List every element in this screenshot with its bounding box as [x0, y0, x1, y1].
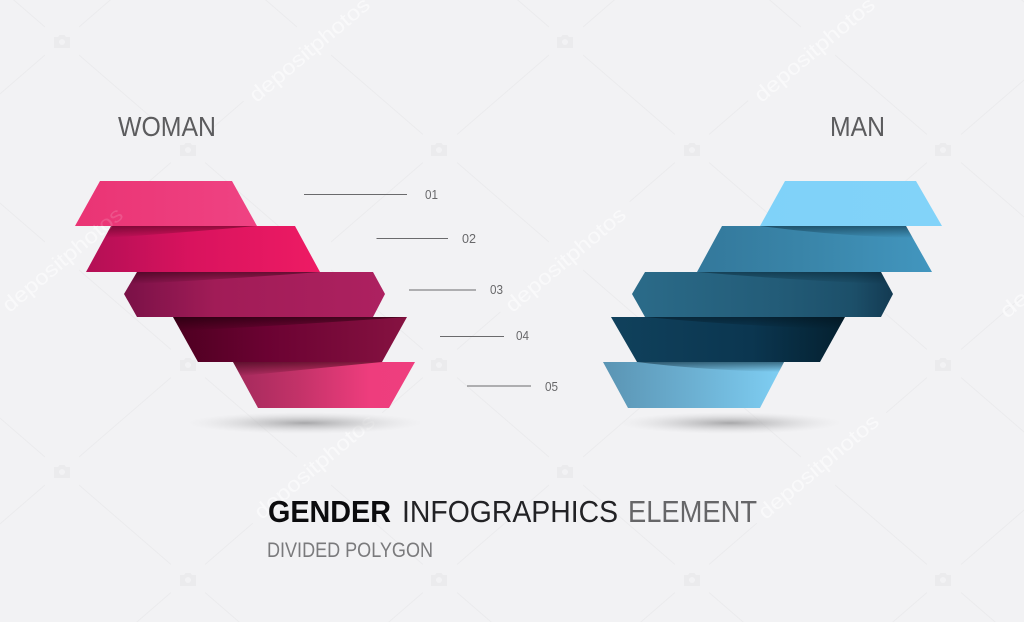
watermark text: depositphotos: [501, 203, 631, 317]
label 01: 01: [425, 188, 438, 202]
main title: [268, 494, 757, 529]
man band 5: [603, 362, 784, 408]
heading: woman: WOMAN: [118, 111, 216, 142]
watermark text: depositphotos: [750, 0, 880, 107]
woman band 5: [233, 362, 415, 408]
woman band 4: [173, 317, 407, 362]
man band 4: [611, 317, 845, 362]
watermark text: depositphotos: [250, 410, 380, 524]
label 02: [376, 232, 476, 246]
watermark camera icons: [54, 35, 951, 586]
man band 2: [697, 226, 932, 272]
man band 1: [760, 181, 942, 226]
watermark text: depositphotos: [245, 0, 375, 107]
label 04: [440, 329, 529, 343]
leader labels: [304, 188, 558, 394]
main title: INFOGRAPHICS: [402, 494, 618, 529]
watermark over woman polygon: depositphotos: [0, 203, 128, 317]
label 05: [467, 380, 558, 394]
shadow: woman polygon: [187, 412, 423, 434]
shadow: man polygon: [618, 412, 842, 434]
main title: ELEMENT: [628, 494, 757, 529]
woman band 1: [75, 181, 257, 226]
panel: woman divided polygon: [75, 181, 415, 408]
main title: GENDER: [268, 494, 391, 529]
label 03: 03: [490, 283, 503, 297]
watermark text: depositphotos: [754, 410, 884, 524]
watermark text: depositphotos: [0, 203, 128, 317]
panel: man divided polygon: [603, 181, 942, 408]
label 04: 04: [516, 329, 529, 343]
label 05: 05: [545, 380, 558, 394]
label 02: 02: [462, 232, 476, 246]
man band 3: [632, 272, 893, 317]
subtitle: DIVIDED POLYGON: [267, 539, 433, 562]
woman band 3: [124, 272, 385, 317]
label 01: [304, 188, 438, 202]
woman band 2: [86, 226, 320, 272]
label 03: [409, 283, 503, 297]
heading: man: MAN: [830, 111, 885, 142]
infographic canvas: [75, 116, 942, 557]
